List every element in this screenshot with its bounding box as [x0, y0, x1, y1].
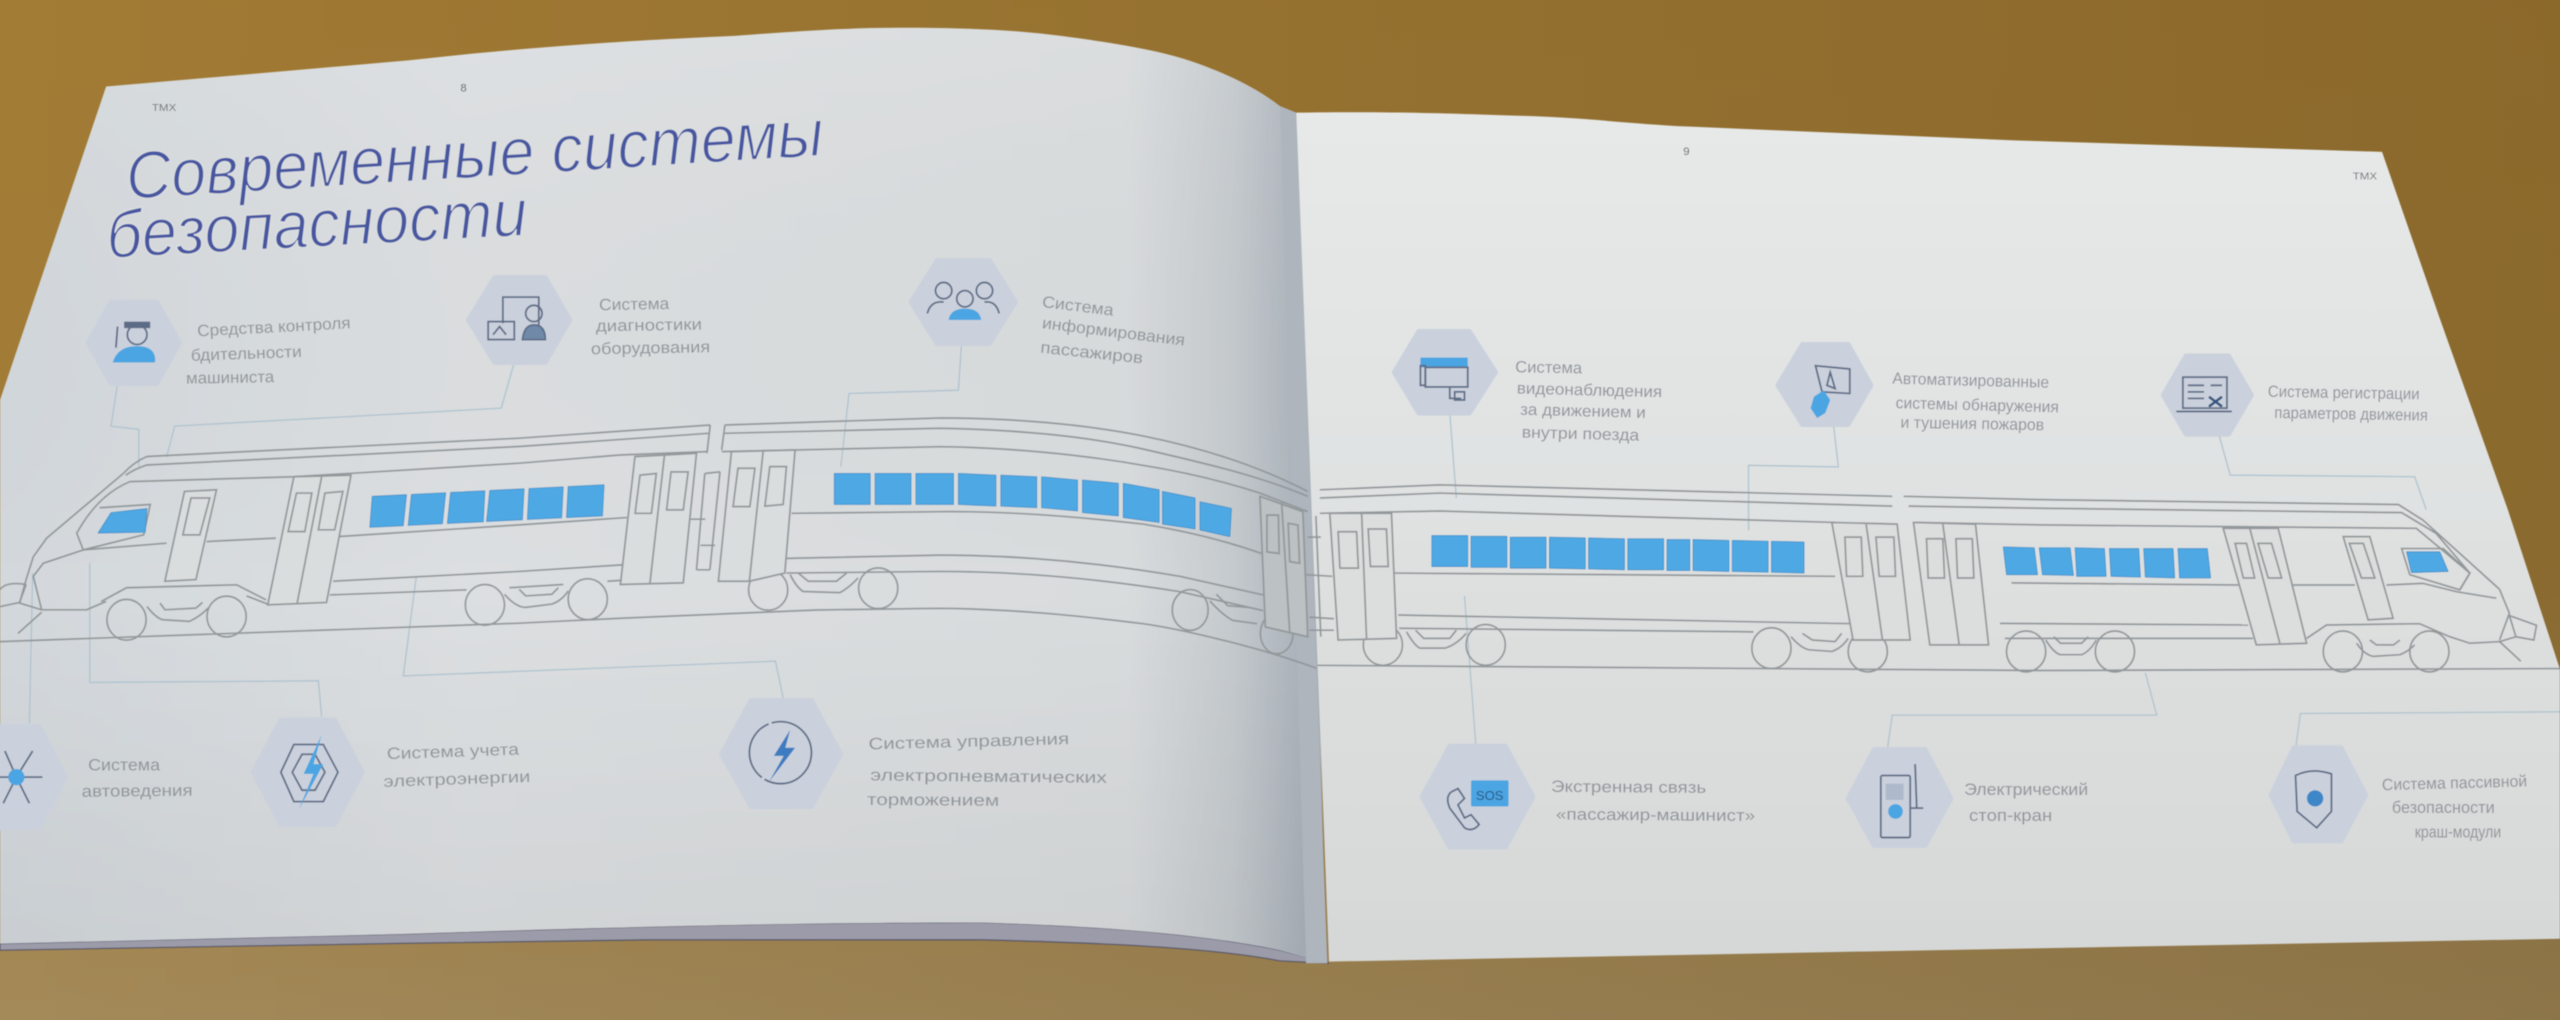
label: Система учета	[386, 741, 520, 763]
label: электропневматических	[870, 766, 1107, 787]
train car 2: curved over page gutter	[718, 418, 1308, 654]
label: Электрический	[1964, 781, 2088, 799]
label	[2268, 383, 2428, 425]
label: краш-модули	[2415, 824, 2501, 842]
callout: video surveillance	[1394, 331, 1662, 445]
icon: passengers group	[927, 282, 999, 320]
header: page marks, left	[152, 82, 467, 114]
label: диагностики	[596, 316, 702, 335]
label	[383, 741, 531, 791]
header: page marks, right: 9	[1683, 146, 1690, 158]
label: оборудования	[591, 338, 710, 358]
callout: electric energy metering	[253, 720, 531, 824]
label	[186, 314, 351, 388]
icon: network hub	[0, 751, 42, 803]
callout: passive safety crash modules	[2271, 748, 2527, 842]
label	[82, 757, 193, 801]
title	[105, 95, 826, 273]
label	[1964, 781, 2088, 825]
label: Система	[88, 757, 161, 775]
windows: car 3	[1432, 536, 1804, 573]
header: page marks, left: 8	[460, 82, 467, 94]
header: page marks, right	[1683, 146, 2378, 183]
label: Система	[1041, 293, 1116, 320]
train car 4: right head car	[1904, 496, 2536, 672]
callout: passenger information	[911, 260, 1186, 367]
label	[1040, 293, 1186, 367]
wheels and bogies: car 4	[2007, 631, 2449, 672]
callout: electric emergency brake	[1848, 749, 2088, 846]
label: электроэнергии	[383, 768, 531, 791]
label: Экстренная связь	[1551, 778, 1706, 797]
label: стоп-кран	[1969, 807, 2052, 825]
label	[2382, 772, 2527, 842]
windows: car 1	[98, 485, 604, 533]
rails	[0, 608, 2560, 671]
label	[1515, 358, 1662, 445]
callout: equipment diagnostics	[469, 278, 710, 362]
train car 1: left head car	[0, 425, 720, 640]
label: Система	[599, 295, 670, 314]
label: машиниста	[186, 368, 275, 388]
callout: automatic train operation	[0, 727, 193, 828]
label: Автоматизированные	[1892, 370, 2049, 392]
label: «пассажир-машинист»	[1556, 806, 1755, 825]
icon: diagnostics screens	[488, 297, 545, 340]
label	[1551, 778, 1755, 825]
icon: shield	[2296, 771, 2331, 828]
title: Современные системы	[124, 95, 826, 214]
wheels and bogies: car 3	[1363, 624, 1887, 672]
header: page marks, left: ТМХ	[152, 103, 177, 114]
label: Система управления	[868, 730, 1069, 753]
callout: automatic fire detection and suppression	[1778, 344, 2059, 434]
label: за движением и	[1520, 401, 1646, 422]
label: Система пассивной	[2382, 772, 2527, 794]
label: системы обнаружения	[1895, 394, 2059, 416]
icon: phone with SOS bubble	[1448, 780, 1509, 830]
icon: lightning in hexagon	[281, 735, 338, 810]
label: внутри поезда	[1522, 424, 1641, 445]
label	[591, 295, 710, 358]
panel: left page	[0, 28, 1329, 963]
header: page marks, right: ТМХ	[2353, 172, 2378, 183]
icon: stop valve panel	[1881, 764, 1923, 838]
callout: emergency passenger-driver link	[1422, 746, 1755, 847]
title: безопасности	[105, 175, 529, 273]
panel: right page	[1280, 106, 2560, 963]
label: автоведения	[82, 782, 193, 801]
label: Средства контроля	[197, 314, 351, 340]
label: торможением	[867, 791, 999, 810]
icon: driver	[113, 322, 155, 362]
callout: motion parameter recording	[2163, 356, 2428, 434]
label: Система	[1515, 358, 1583, 377]
icon: gauge with lightning	[749, 722, 811, 784]
label: и тушения пожаров	[1900, 414, 2044, 434]
label: безопасности	[2392, 799, 2495, 817]
connector lines	[29, 343, 2560, 749]
windows: car 4	[2003, 547, 2448, 578]
icon: phone with SOS bubble: SOS	[1476, 788, 1504, 803]
wheels and bogies: car 1	[107, 579, 607, 640]
icon: fire alarm	[1811, 366, 1850, 418]
label: информирования	[1041, 314, 1186, 350]
label: пассажиров	[1040, 339, 1144, 367]
label	[1892, 370, 2059, 434]
wheels and bogies: car 2	[749, 568, 1293, 654]
train illustration	[0, 418, 2560, 672]
label: параметров движения	[2274, 404, 2428, 425]
icon: CCTV camera	[1420, 358, 1468, 400]
icon: recorder laptop	[2176, 377, 2232, 411]
callout: driver vigilance control	[88, 302, 351, 388]
label: бдительности	[191, 343, 302, 365]
label: видеонаблюдения	[1517, 379, 1662, 401]
windows: car 2	[834, 473, 1232, 537]
label	[867, 730, 1107, 810]
callout: electropneumatic braking control	[722, 700, 1107, 810]
label: Система регистрации	[2268, 383, 2420, 403]
train car 3	[1306, 485, 1910, 672]
